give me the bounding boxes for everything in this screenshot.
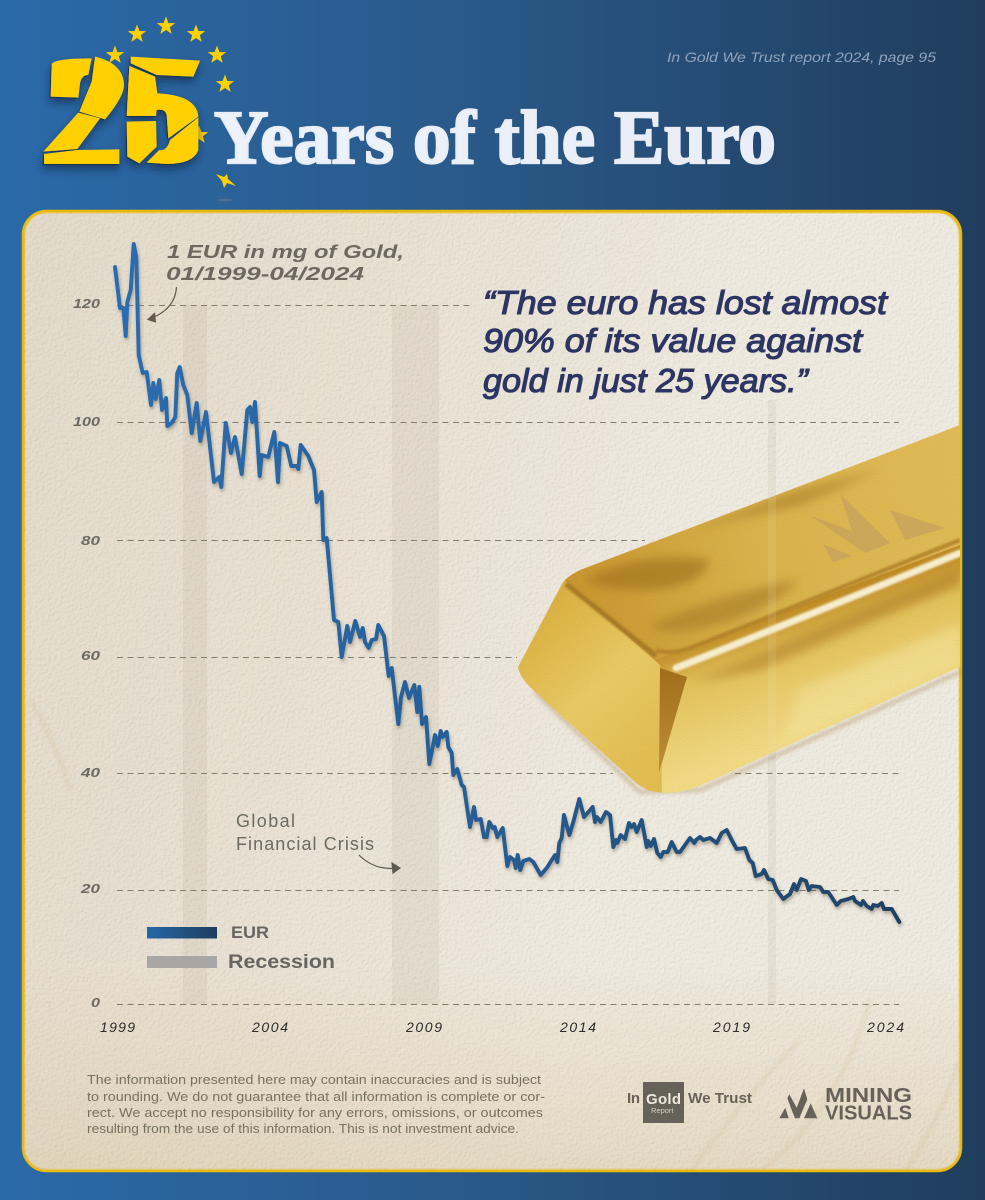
y-axis labels: 80 (81, 533, 101, 548)
callout: recession band over bar (768, 475, 776, 750)
logo: In Gold We Trust (627, 1082, 752, 1123)
disclaimer: to rounding. We do not guarantee that all information is complete or cor- (87, 1089, 545, 1104)
y-axis labels: 120 (73, 296, 101, 311)
recession bands (183, 305, 776, 1004)
logo: Mining Visuals (779, 1085, 912, 1124)
legend (147, 923, 335, 973)
x-axis labels (100, 1019, 904, 1035)
headline numeral 25 (43, 57, 200, 164)
bar top face (564, 425, 960, 660)
disclaimer: The information presented here may contain inaccuracies and is subject (87, 1072, 541, 1087)
bar end face (510, 578, 662, 800)
arrow: crisis pointer (359, 855, 400, 873)
disclaimer: rect. We accept no responsibility for any errors, omissions, or outcomes (87, 1105, 544, 1120)
annotation: series description: 01/1999-04/2024 (166, 263, 364, 284)
logo: Mining Visuals: VISUALS (825, 1102, 912, 1124)
logo: Mining Visuals: MINING (825, 1085, 912, 1107)
x-axis labels: 2004 (251, 1019, 288, 1035)
bar side face (650, 545, 960, 800)
legend: EUR (231, 923, 269, 942)
x-axis labels: 1999 (100, 1019, 135, 1035)
annotation: global financial crisis (236, 811, 374, 854)
x-axis labels: 2014 (559, 1019, 596, 1035)
annotation: series description (166, 241, 404, 284)
legend: Recession (228, 952, 335, 973)
logo: In Gold We Trust: Report (651, 1106, 674, 1115)
logo: In Gold We Trust: We Trust (688, 1090, 752, 1107)
x-axis labels: 2019 (712, 1019, 750, 1035)
logo: In Gold We Trust: Gold (646, 1091, 681, 1108)
y-axis labels: 0 (91, 995, 101, 1010)
legend swatch: recession (147, 956, 217, 968)
x-axis labels: 2024 (866, 1019, 904, 1035)
annotation: series description: 1 EUR in mg of Gold, (167, 241, 404, 262)
quote: gold in just 25 years.” (483, 362, 810, 399)
annotation: global financial crisis: Financial Crisis (236, 834, 374, 854)
y-axis labels: 20 (80, 881, 101, 896)
arrow: series pointer (148, 287, 176, 322)
legend swatch: EUR (147, 927, 217, 938)
disclaimer (87, 1072, 545, 1136)
icon: ring of EU stars (106, 16, 236, 202)
line chart: EUR in mg of gold (115, 244, 899, 922)
logo: In Gold We Trust: In (627, 1090, 640, 1107)
disclaimer: resulting from the use of this information. This is not investment advice. (87, 1121, 519, 1136)
source note: In Gold We Trust report 2024, page 95 (667, 49, 936, 65)
gold bar image (510, 415, 965, 800)
bar dark corner (659, 668, 687, 773)
quote (483, 284, 889, 399)
annotation: global financial crisis: Global (236, 811, 295, 831)
x-axis labels: 2009 (405, 1019, 442, 1035)
y-axis labels: 100 (73, 414, 101, 429)
bar embossed logo (811, 494, 945, 562)
title: Years of the Euro (214, 96, 776, 180)
chart gridlines (117, 306, 899, 1004)
panel: paper chart card (24, 212, 960, 1172)
quote: “The euro has lost almost (483, 284, 889, 321)
y-axis labels: 60 (81, 648, 101, 663)
bar edge highlight (676, 553, 960, 668)
y-axis labels (73, 296, 101, 1010)
quote: 90% of its value against (483, 322, 864, 359)
y-axis labels: 40 (80, 765, 101, 780)
